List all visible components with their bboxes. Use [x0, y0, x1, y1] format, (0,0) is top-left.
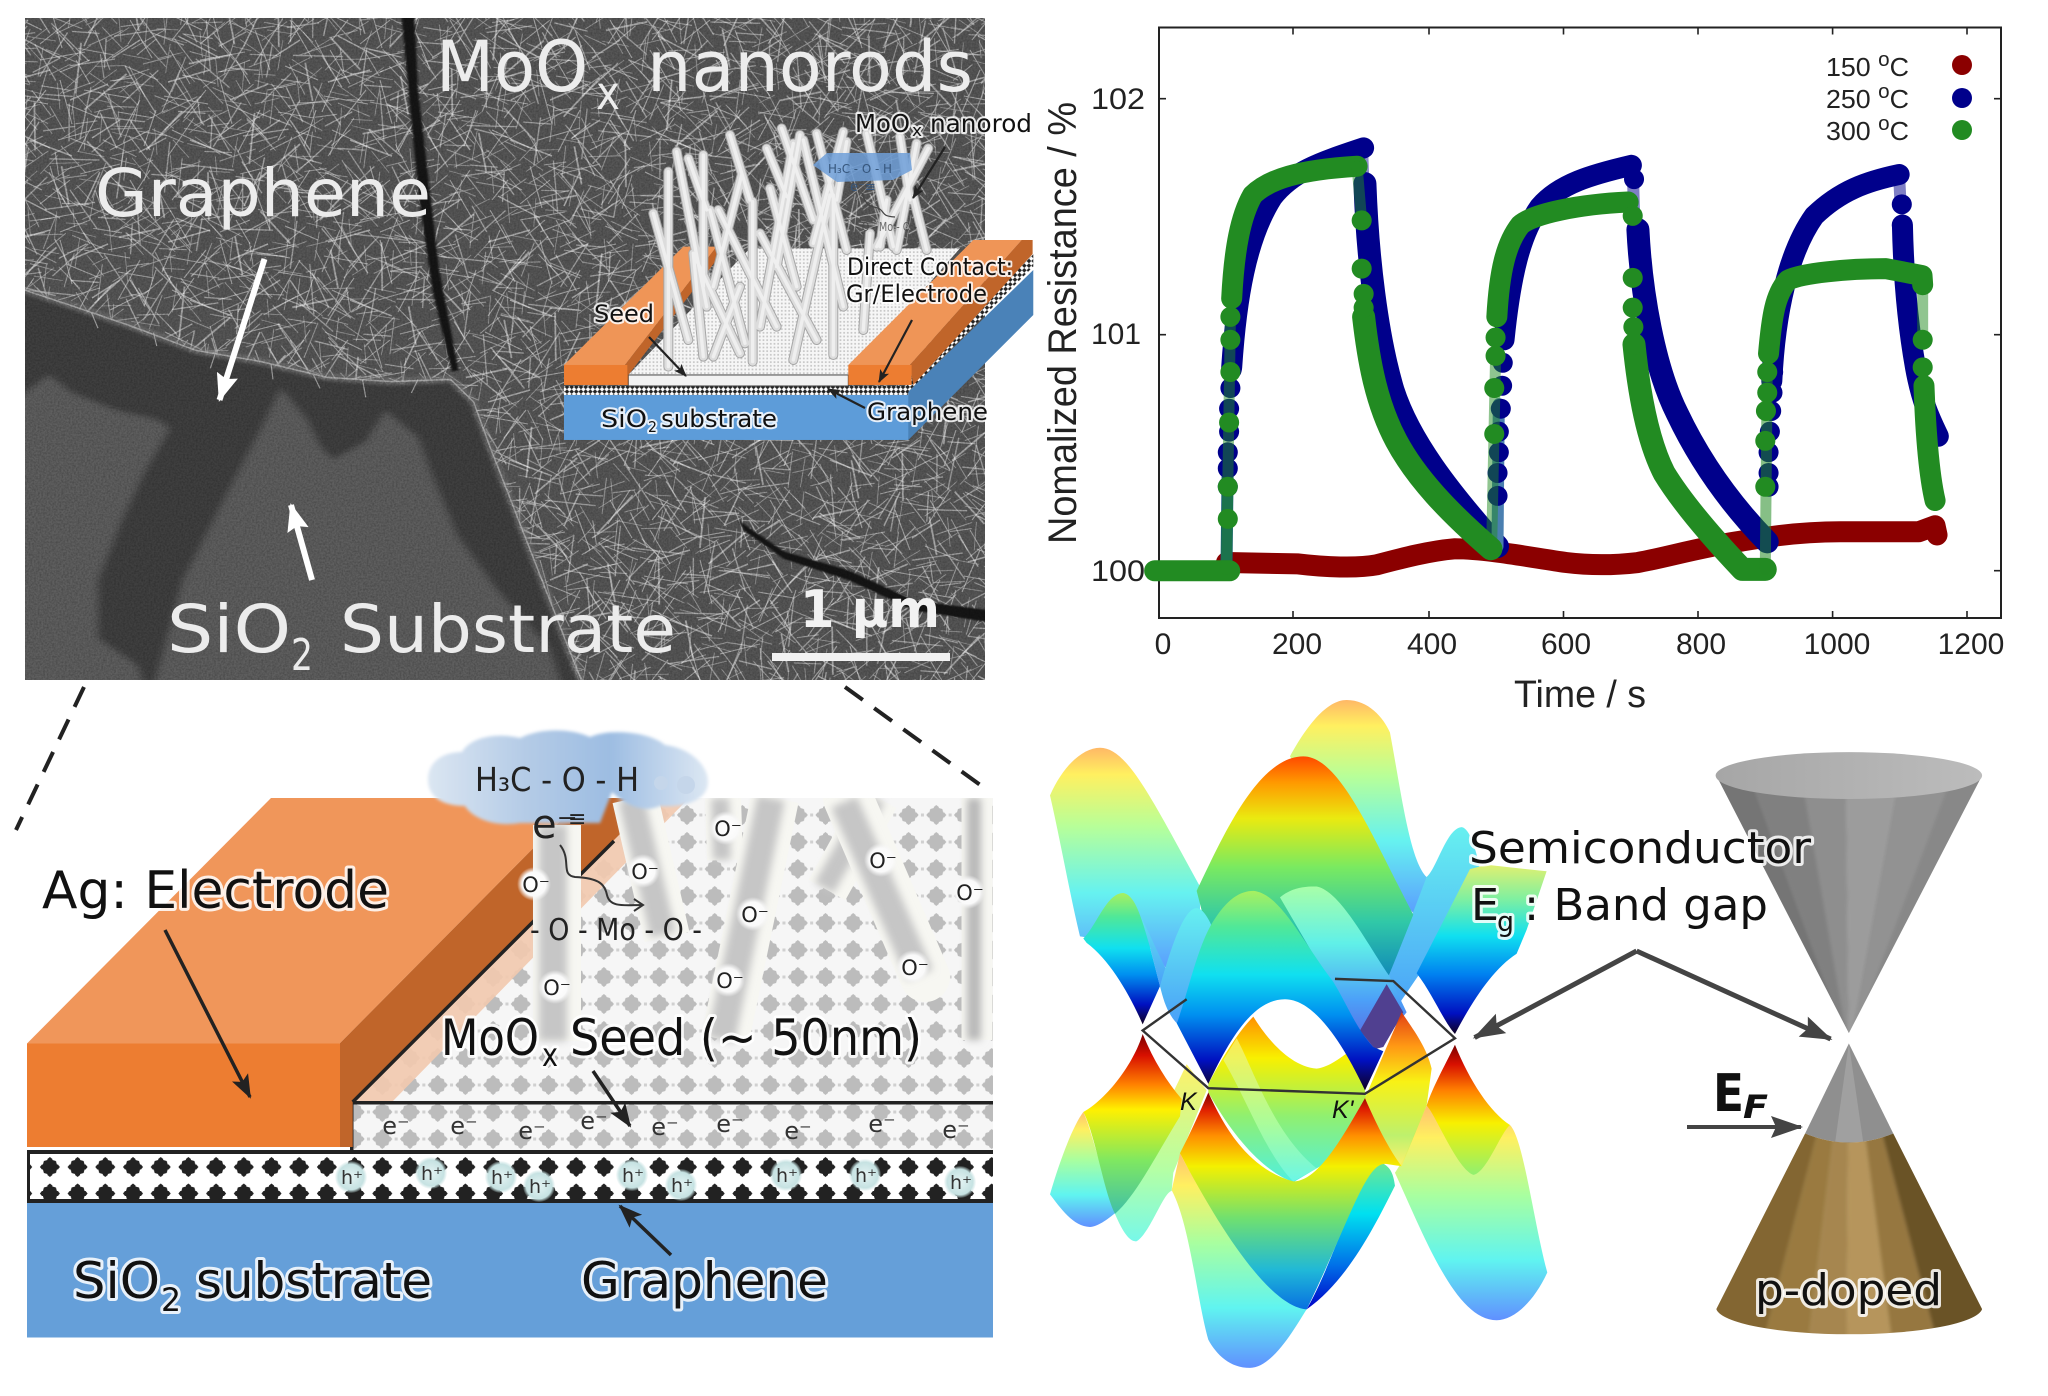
holes in graphene: h⁺	[776, 1165, 798, 1187]
arrow: electrode	[165, 930, 250, 1097]
methanol cloud	[428, 730, 708, 824]
arrow: to substrate	[291, 505, 312, 580]
label: SiO2 Substrate: 2	[291, 630, 313, 681]
inset labels: SiO	[601, 405, 647, 433]
MoOx seed top face	[352, 798, 993, 1102]
label: MoOx nanorods: nanorods	[647, 26, 973, 108]
holes in graphene: h⁺	[421, 1163, 443, 1185]
label: Eg band gap: g	[1497, 905, 1514, 938]
panel: Dirac cone graphene	[1687, 752, 1982, 1334]
holes in graphene: h⁺	[622, 1165, 644, 1187]
electrodes	[564, 240, 1033, 385]
inset labels: Graphene	[867, 398, 988, 426]
K point labels: K'	[1332, 1096, 1355, 1124]
grain noise	[25, 18, 985, 680]
x axis tick labels: 0	[1155, 628, 1171, 661]
label: SiO2 substrate: SiO	[73, 1252, 160, 1310]
adsorbed oxygen ions: O⁻	[714, 817, 742, 841]
adsorbed oxygen ions: O⁻	[956, 881, 984, 905]
x axis tick labels: 200	[1272, 628, 1322, 661]
lower cone doped section	[1716, 1134, 1982, 1334]
x axis tick labels: 600	[1541, 628, 1591, 661]
nanorods	[653, 128, 928, 367]
SiO2 exposed substrate region	[25, 287, 584, 680]
inset labels: Direct Contact:	[847, 253, 1013, 281]
methanol cloud: - O - Mo - O -	[855, 220, 917, 234]
inset: device schematic	[564, 109, 1033, 440]
arrow: to graphene	[220, 259, 264, 400]
label: p-doped: p-doped	[1755, 1265, 1942, 1316]
label: MoOx seed	[441, 1009, 922, 1074]
inset labels: substrate	[661, 405, 777, 433]
seed layer	[628, 248, 960, 386]
arrow: graphene	[620, 1206, 671, 1255]
legend: o	[1878, 81, 1890, 103]
series: 250 C	[1226, 148, 1938, 571]
legend: 250	[1826, 84, 1869, 114]
adsorbed oxygen ions: O⁻	[716, 969, 744, 993]
x axis tick labels: 1200	[1938, 628, 2004, 661]
zoom guide dashed lines	[16, 687, 983, 830]
label: MoOx seed: x	[542, 1036, 558, 1074]
holes in graphene	[335, 1157, 976, 1202]
holes in graphene: h⁺	[950, 1172, 972, 1194]
y axis tick labels	[1091, 83, 1145, 588]
label: Graphene: Graphene	[581, 1252, 828, 1310]
methanol cloud: e⁻≡	[850, 180, 876, 195]
label: MoOx nanorods: MoO	[436, 26, 588, 108]
y axis tick labels: 102	[1091, 83, 1145, 116]
panel: semiconductor band structure	[1050, 700, 1831, 1368]
substrate block	[564, 270, 1033, 440]
electrons in seed: e⁻	[450, 1112, 478, 1140]
electrons in seed: e⁻	[518, 1117, 546, 1145]
label: MoOx nanorods: x	[596, 66, 620, 120]
arrow: seed	[593, 1071, 630, 1126]
inset labels: Seed	[594, 300, 654, 328]
series: 300 C	[1155, 166, 1935, 571]
label: Ag electrode: Ag: Electrode	[42, 861, 389, 921]
label: Semiconductor: Semiconductor	[1469, 823, 1812, 874]
graphene layer	[564, 254, 1033, 395]
legend: 300	[1826, 116, 1869, 146]
label: Eg band gap: E	[1471, 880, 1499, 931]
label: Graphene: Graphene	[95, 155, 431, 232]
label: Fermi level: F	[1743, 1088, 1768, 1126]
panel: SEM micrograph	[25, 18, 985, 680]
holes in graphene: h⁺	[855, 1165, 877, 1187]
label: MoOx nanorods	[436, 26, 973, 120]
inset labels	[594, 109, 1032, 436]
label: SiO2 substrate: 2	[161, 1281, 181, 1319]
Brillouin zone hexagon	[1143, 979, 1455, 1094]
lower cone grey section	[1805, 1043, 1893, 1143]
series: 150 C	[1226, 526, 1937, 567]
inset labels: MoO	[855, 109, 910, 138]
label: Fermi level	[1713, 1064, 1768, 1126]
SEM nanorod texture	[25, 18, 985, 680]
legend	[1826, 49, 1972, 146]
K point labels: K	[1180, 1088, 1198, 1116]
electrons in seed: e⁻	[942, 1116, 970, 1144]
x axis tick labels: 800	[1676, 628, 1726, 661]
y axis tick labels: 100	[1091, 555, 1145, 588]
legend: C	[1890, 116, 1909, 146]
holes in graphene: h⁺	[529, 1176, 551, 1198]
arrows to band gap points	[1475, 951, 1831, 1039]
electrons in seed	[382, 1107, 970, 1145]
methanol cloud	[813, 153, 917, 234]
label: SiO2 substrate: substrate	[196, 1252, 432, 1310]
inset labels: Gr/Electrode	[846, 280, 987, 308]
arrow: Fermi level	[1687, 1125, 1801, 1129]
electrons in seed: e⁻	[716, 1110, 744, 1138]
label: SiO2 Substrate: SiO	[167, 591, 291, 668]
cracks in film	[401, 9, 1006, 625]
x axis tick labels	[1155, 628, 2004, 661]
upper cone	[1716, 752, 1982, 1033]
inset labels: 2	[648, 418, 657, 436]
legend: C	[1890, 84, 1909, 114]
legend: 150	[1826, 52, 1869, 82]
SiO2 substrate	[27, 1203, 993, 1338]
adsorbed oxygen ions: O⁻	[631, 860, 659, 884]
adsorbed oxygen ions: O⁻	[901, 956, 929, 980]
label: MoOx seed: Seed (~ 50nm)	[570, 1009, 922, 1067]
x axis title: Time / s	[1514, 674, 1646, 716]
label: SiO2 Substrate	[167, 591, 676, 681]
adsorbed oxygen ions: O⁻	[741, 903, 769, 927]
electrons in seed: e⁻	[651, 1113, 679, 1141]
adsorbed oxygen ions: O⁻	[543, 976, 571, 1000]
holes in graphene: h⁺	[671, 1175, 693, 1197]
label: SiO2 Substrate: Substrate	[340, 591, 676, 668]
legend: o	[1878, 49, 1890, 71]
y axis tick labels: 101	[1091, 318, 1141, 351]
label: Fermi level: E	[1713, 1064, 1744, 1124]
label: SiO2 substrate	[73, 1252, 432, 1319]
electron symbol and pathway	[530, 802, 702, 948]
lower band surface	[1050, 1012, 1547, 1368]
electrons in seed: e⁻	[382, 1112, 410, 1140]
adsorbed oxygen ions: O⁻	[522, 873, 550, 897]
electrons in seed: e⁻	[580, 1107, 608, 1135]
axes frame and ticks	[1159, 28, 2001, 618]
holes in graphene: h⁺	[491, 1167, 513, 1189]
scale bar 1 μm: 1 μm	[800, 580, 940, 640]
inset arrows	[649, 147, 945, 408]
graphene lattice layer	[27, 1150, 993, 1203]
scale bar 1 μm	[772, 580, 950, 661]
x axis tick labels: 1000	[1804, 628, 1870, 661]
y axis title: Nomalized Resistance / %	[1041, 102, 1085, 544]
nanorods	[553, 798, 977, 1041]
x axis tick labels: 400	[1407, 628, 1457, 661]
methanol cloud: H₃C - O - H	[475, 760, 639, 799]
electrons in seed: e⁻	[784, 1117, 812, 1145]
front conduction band	[1177, 891, 1383, 1090]
label: Eg band gap: : Band gap	[1524, 880, 1768, 931]
panel: resistance chart	[1041, 28, 2004, 716]
panel: device cross-section	[27, 730, 993, 1338]
peach contact strip	[353, 798, 689, 1102]
electron symbol and pathway: ≡	[568, 807, 586, 832]
K point labels	[1180, 1088, 1355, 1124]
legend: C	[1890, 52, 1909, 82]
electrons in seed: e⁻	[868, 1110, 896, 1138]
Ag electrode	[27, 798, 656, 1147]
label: MoOx seed: MoO	[441, 1009, 539, 1067]
inset labels: nanorod	[930, 109, 1032, 138]
upper band surface	[1050, 700, 1547, 1049]
electron symbol and pathway: - O - Mo - O -	[530, 913, 702, 948]
methanol cloud: H₃C - O - H	[828, 162, 892, 176]
electron symbol and pathway: e⁻	[532, 802, 578, 848]
inset labels: x	[912, 121, 922, 140]
adsorbed oxygen ions: O⁻	[869, 849, 897, 873]
adsorbed oxygen ions	[517, 811, 985, 1004]
holes in graphene: h⁺	[341, 1167, 363, 1189]
legend: o	[1878, 113, 1890, 135]
seed front strip	[350, 1101, 993, 1150]
